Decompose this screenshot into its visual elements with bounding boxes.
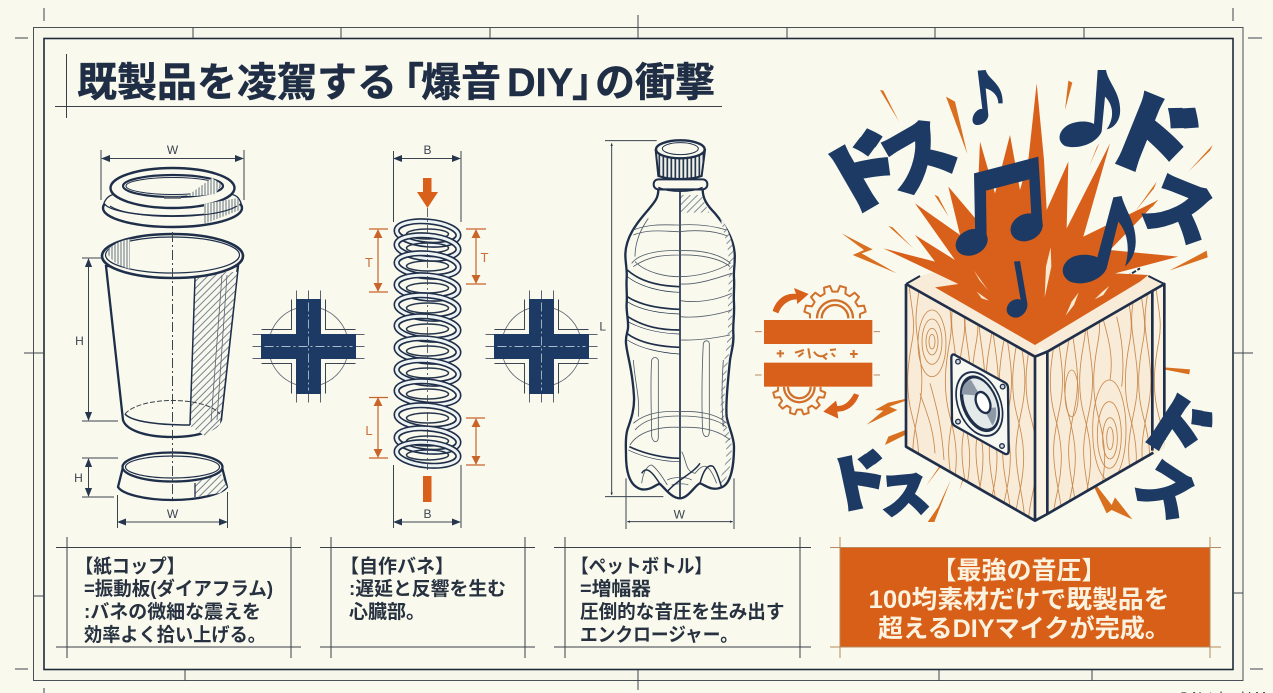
spring dimensions: [394, 151, 461, 528]
cup lid: [103, 168, 242, 227]
bottle hatching: [681, 195, 733, 484]
ドス bottom left: ド: [823, 444, 895, 522]
caption: result callout: [830, 537, 1221, 658]
caption: bottle: =増幅器: [580, 578, 651, 600]
beamed note: [951, 157, 1047, 261]
ドス top left: [810, 105, 970, 229]
force arrow: [417, 178, 438, 208]
caption: spring: 【自作バネ】: [340, 556, 454, 578]
equals bars: [764, 320, 872, 387]
bottom force bar: [423, 476, 432, 502]
speaker: [946, 354, 1013, 454]
caption: paper cup: 効率よく拾い上げる。: [84, 624, 266, 646]
ドス top left: ス: [868, 105, 970, 210]
caption: bottle: [554, 537, 811, 658]
wood top rim: [906, 267, 1164, 357]
title: の衝撃: [595, 61, 715, 105]
bottle cap: [656, 140, 705, 179]
ドス bottom right: [1124, 379, 1223, 533]
paper cup illustration: [74, 143, 244, 528]
spring labels: [365, 143, 489, 521]
caption: bottle: 圧倒的な音圧を生み出す: [580, 601, 784, 623]
ドス top left: ド: [810, 119, 917, 229]
caption: paper cup: :バネの微細な震えを: [84, 601, 261, 623]
caption: paper cup: =振動板(ダイアフラム): [84, 577, 273, 600]
ドス bottom left: [823, 444, 932, 525]
title: 爆音: [421, 61, 501, 105]
equals centre marks: [777, 348, 858, 359]
cup base ring: [118, 452, 227, 500]
box edges: [906, 276, 1164, 521]
bottle labels: [599, 320, 686, 521]
exploding wooden box illustration: [828, 70, 1213, 522]
bottle labels: W: [674, 507, 686, 521]
caption: result callout: 【最強の音圧】: [932, 557, 1106, 585]
caption: spring: [320, 537, 535, 658]
title: 既製品を凌駕する: [77, 61, 397, 105]
equals ticks: [755, 332, 880, 375]
caption: bottle: 【ペットボトル】: [571, 556, 712, 578]
cup dimension labels: W: [167, 143, 179, 157]
wood panels: [906, 284, 1164, 521]
spring labels: T: [365, 255, 373, 270]
box top rim back: [930, 258, 1140, 277]
bottle neck ring: [654, 179, 707, 191]
note top small: [973, 70, 1003, 125]
bottle labels: L: [599, 320, 606, 334]
bottle body: [625, 189, 735, 498]
ドス top right: ス: [1133, 162, 1225, 258]
explosion burst: [883, 83, 1178, 345]
sparks: [842, 81, 1213, 522]
spring orange dimensions: [369, 229, 486, 465]
cup dimensions: [82, 150, 244, 528]
title: 」: [572, 61, 612, 105]
white sparks in burst: [974, 247, 1109, 316]
top gear: [804, 286, 866, 318]
plus sign 1: [252, 290, 364, 402]
ドス bottom left: ス: [879, 467, 932, 525]
note top large: [1060, 70, 1120, 147]
bottle dimensions: [605, 141, 734, 529]
cup dimension labels: W: [167, 507, 179, 521]
music notes: [951, 70, 1136, 318]
cup dimension labels: H: [74, 471, 83, 485]
ドス bottom right: ド: [1128, 379, 1223, 476]
spring labels: B: [423, 507, 432, 521]
cup body: [102, 234, 243, 437]
note bottom: [1007, 261, 1027, 318]
plus sign 2: [486, 290, 598, 402]
spring labels: L: [365, 423, 373, 438]
caption: paper cup: 【紙コップ】: [75, 556, 185, 578]
ドス top right: [1093, 77, 1225, 258]
caption: result callout: 超えるDIYマイクが完成。: [878, 614, 1170, 643]
title: [55, 54, 722, 118]
rotation arrows: [773, 288, 859, 419]
title: DIY: [507, 61, 573, 105]
spring labels: T: [481, 250, 489, 265]
spring illustration: [365, 143, 489, 528]
spring labels: B: [423, 143, 432, 157]
wood grain left: [908, 260, 1037, 568]
caption: bottle: エンクロージャー。: [580, 624, 738, 646]
equals sign with gears: [755, 286, 880, 419]
bottom gear: [773, 387, 825, 414]
bottle ribs and lines: [627, 185, 732, 498]
plastic bottle illustration: [599, 140, 735, 529]
ドス top right: ド: [1093, 77, 1209, 199]
spring coils: [396, 208, 459, 470]
caption: spring: 心臓部。: [349, 601, 425, 623]
note right: [1063, 196, 1136, 283]
title: 「: [384, 61, 424, 105]
wood grain right: [1050, 290, 1164, 509]
cup dimension labels: H: [75, 334, 84, 348]
caption: result callout: 100均素材だけで既製品を: [868, 586, 1170, 614]
ドス bottom right: ス: [1124, 449, 1206, 533]
caption: spring: :遅延と反響を生む: [349, 578, 506, 600]
cup dimension labels: [74, 143, 179, 521]
caption: paper cup: [56, 537, 301, 658]
